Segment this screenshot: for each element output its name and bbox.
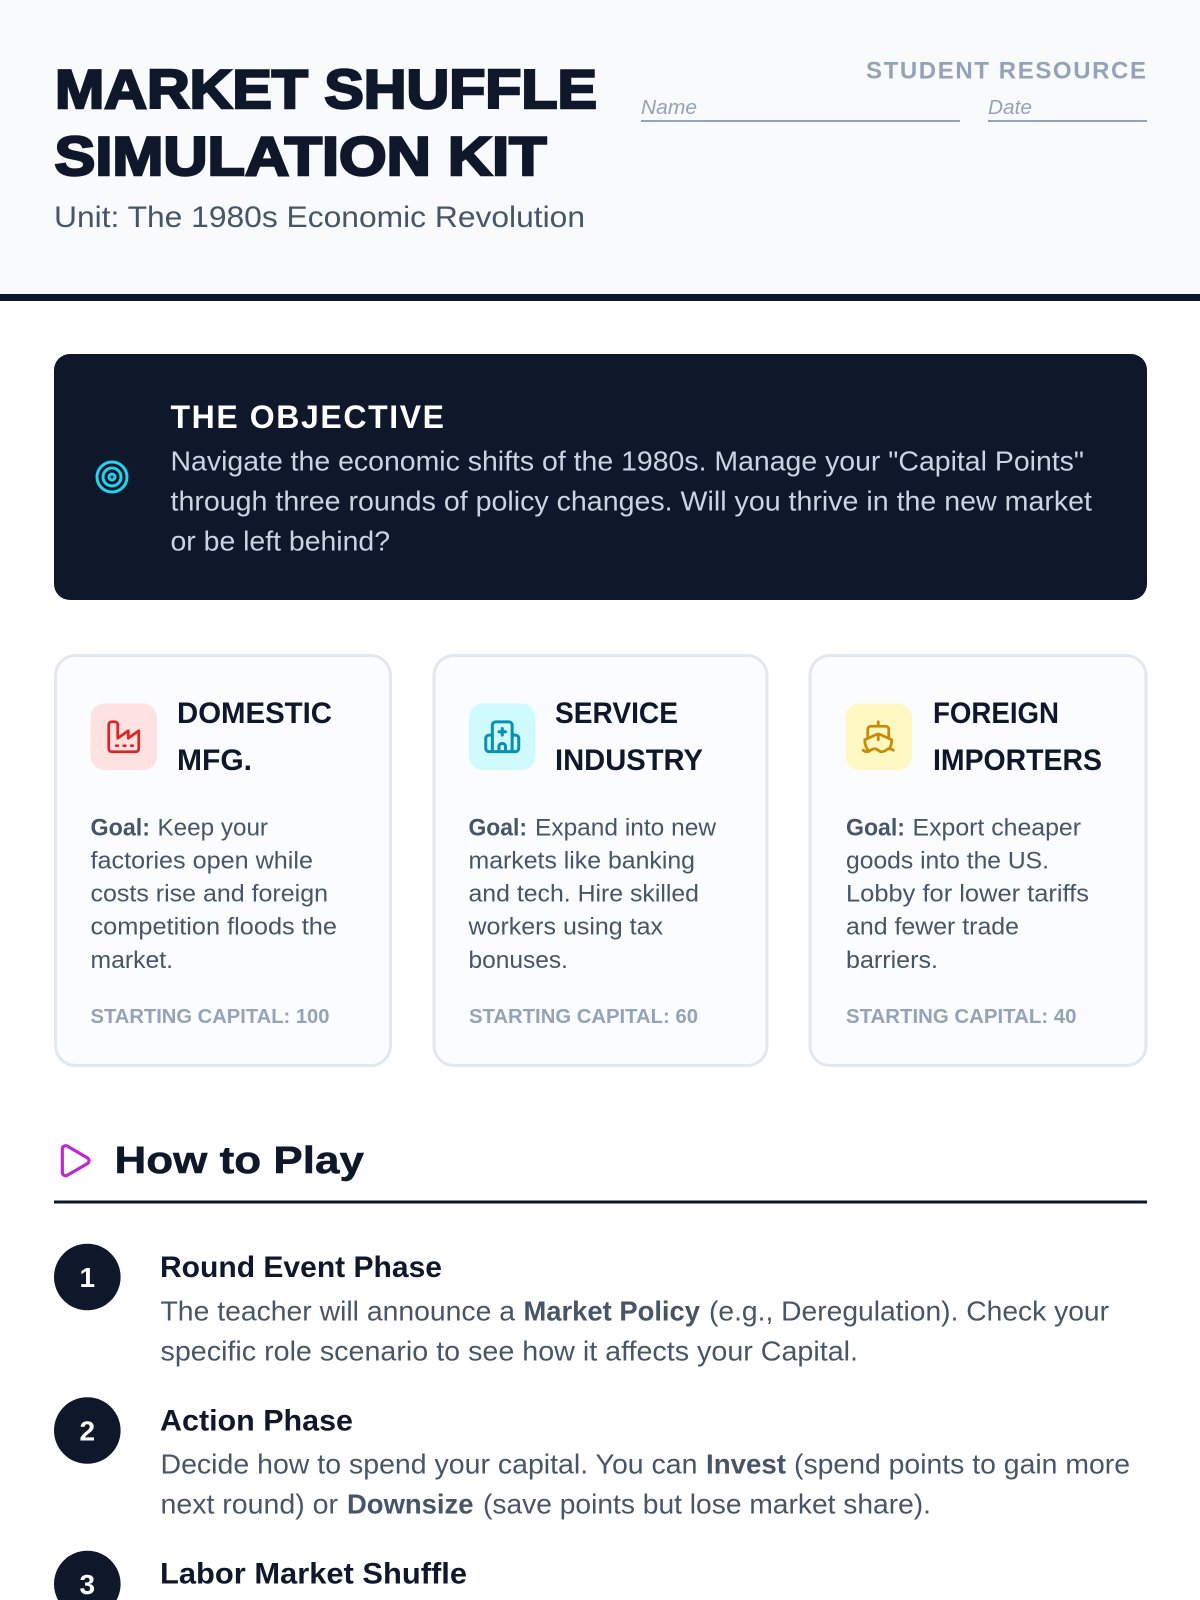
step text: Decide how to spend your capital. You can xyxy=(160,1448,698,1480)
step text xyxy=(160,1448,1130,1520)
card goal text: Lobby for lower tariffs xyxy=(846,880,1089,908)
heading text: How to Play xyxy=(114,1140,364,1182)
card goal text: market. xyxy=(90,947,173,974)
objective heading: THE OBJECTIVE xyxy=(170,399,444,435)
card heading xyxy=(177,697,332,777)
step text: Downsize xyxy=(347,1488,474,1520)
card goal text: and tech. Hire skilled xyxy=(468,880,699,908)
card goal text xyxy=(90,814,337,974)
icon: play xyxy=(62,1146,89,1176)
step text: (spend points to gain more xyxy=(794,1448,1130,1480)
step text: specific role scenario to see how it affects your Capital. xyxy=(160,1336,858,1366)
step text xyxy=(160,1296,1109,1366)
number badge: 3 xyxy=(80,1569,95,1600)
card goal text: factories open while xyxy=(90,848,313,874)
card goal text xyxy=(846,814,1089,974)
card goal text: Export cheaper xyxy=(912,814,1081,842)
step heading: Action Phase xyxy=(160,1404,353,1437)
title: MARKET SHUFFLE xyxy=(55,59,597,120)
panel: domestic manufacturing card xyxy=(56,656,390,1066)
student resource label: STUDENT RESOURCE xyxy=(866,58,1146,85)
card goal text xyxy=(467,814,716,974)
card heading: FOREIGN xyxy=(933,697,1059,730)
number badge xyxy=(54,1551,121,1600)
card goal text: workers using tax xyxy=(467,914,663,940)
step 3 xyxy=(54,1551,467,1600)
step heading: Labor Market Shuffle xyxy=(160,1558,467,1590)
title: SIMULATION KIT xyxy=(54,126,546,187)
number badge xyxy=(54,1397,121,1464)
card heading: INDUSTRY xyxy=(555,744,703,777)
icon: ship xyxy=(846,704,912,770)
step 1 xyxy=(54,1244,1109,1366)
number badge: 2 xyxy=(80,1416,95,1446)
panel: foreign importers card xyxy=(810,656,1146,1066)
name field: Name xyxy=(641,96,697,119)
card goal text: Expand into new xyxy=(535,814,716,842)
number badge xyxy=(54,1244,121,1310)
card goal text: Goal: xyxy=(90,814,150,842)
card goal text: markets like banking xyxy=(468,848,695,874)
number badge: 1 xyxy=(80,1262,95,1293)
step 2 xyxy=(54,1397,1130,1520)
card heading xyxy=(933,697,1102,777)
objective text: Navigate the economic shifts of the 1980s. Manage your "Capital Points" xyxy=(170,446,1084,477)
card goal text: bonuses. xyxy=(468,947,568,974)
date field: Date xyxy=(988,96,1032,119)
objective text: or be left behind? xyxy=(170,526,390,557)
step text: The teacher will announce a xyxy=(160,1296,516,1326)
card goal text: Goal: xyxy=(846,814,905,842)
step text: Invest xyxy=(706,1448,786,1480)
subtitle: Unit: The 1980s Economic Revolution xyxy=(54,201,585,234)
card heading: SERVICE xyxy=(555,697,678,730)
starting capital: STARTING CAPITAL: 60 xyxy=(469,1006,698,1028)
card goal text: barriers. xyxy=(846,947,938,974)
header band xyxy=(0,0,1200,301)
panel: service industry card xyxy=(434,656,767,1066)
step heading: Round Event Phase xyxy=(160,1251,442,1284)
card goal text: Goal: xyxy=(468,814,527,842)
starting capital: STARTING CAPITAL: 40 xyxy=(846,1006,1076,1028)
card heading: DOMESTIC xyxy=(177,697,332,730)
step text: (e.g., Deregulation). Check your xyxy=(709,1296,1109,1326)
card heading: IMPORTERS xyxy=(933,744,1102,777)
icon: hospital xyxy=(469,704,536,770)
section heading: how to play xyxy=(54,1140,1147,1204)
step text: (save points but lose market share). xyxy=(483,1488,931,1520)
panel: objective xyxy=(54,354,1147,600)
card goal text: costs rise and foreign xyxy=(90,880,328,908)
objective text: through three rounds of policy changes. Will you thrive in the new market xyxy=(170,486,1092,517)
card goal text: Keep your xyxy=(158,814,268,842)
card heading: MFG. xyxy=(177,744,252,777)
starting capital: STARTING CAPITAL: 100 xyxy=(90,1006,330,1028)
icon: target xyxy=(97,462,127,492)
card goal text: competition floods the xyxy=(90,914,337,940)
card goal text: and fewer trade xyxy=(846,914,1019,940)
card goal text: goods into the US. xyxy=(846,848,1049,874)
objective text xyxy=(170,446,1092,557)
title xyxy=(54,59,597,187)
icon: factory xyxy=(90,704,157,770)
step text: Market Policy xyxy=(524,1296,701,1326)
card heading xyxy=(555,697,703,777)
step text: next round) or xyxy=(160,1488,338,1520)
